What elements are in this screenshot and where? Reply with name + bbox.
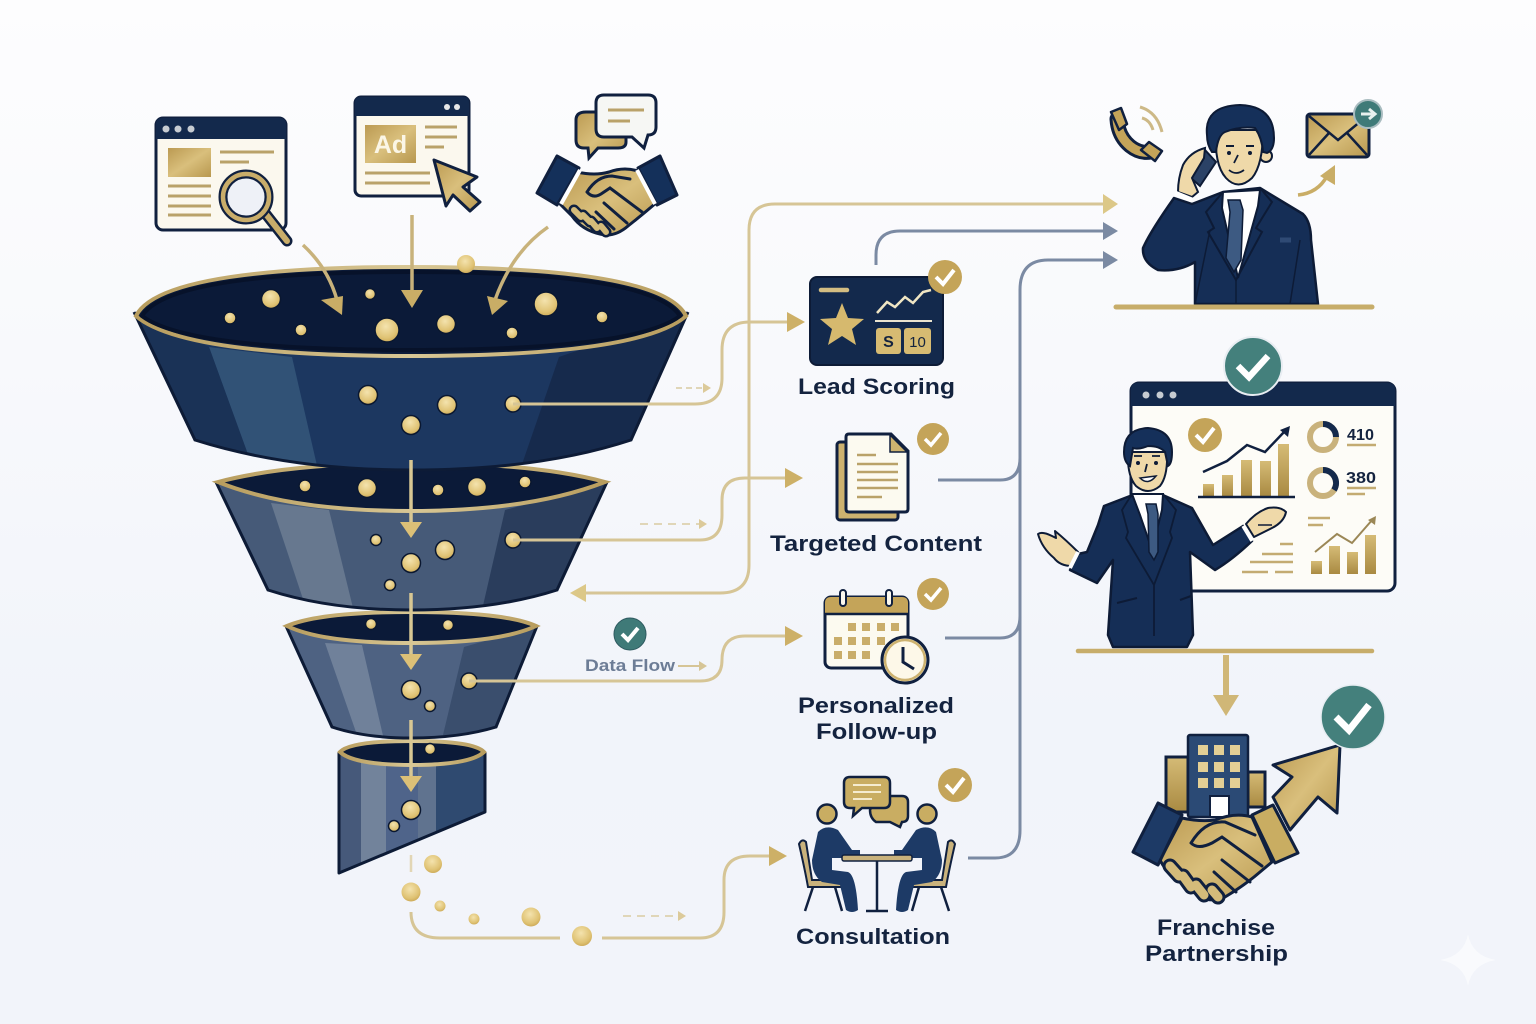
funnel	[134, 255, 690, 880]
person: presenter	[1038, 428, 1372, 651]
arrows: sources into funnel	[303, 215, 548, 315]
icon: sparkle watermark	[1440, 934, 1496, 986]
data flow label	[585, 618, 707, 675]
step: lead scoring: S	[883, 334, 894, 351]
funnel stage 2	[216, 463, 610, 612]
icon: website search	[156, 118, 287, 241]
step: consultation: Consultation	[796, 924, 950, 949]
dashboard panel	[1131, 337, 1395, 591]
falling leads	[402, 855, 592, 946]
funnel lead dots	[224, 255, 608, 832]
dashboard panel: 410	[1347, 427, 1374, 444]
step: lead scoring: 10	[909, 334, 926, 351]
icon: online ad	[355, 97, 480, 211]
icon: online ad: Ad	[374, 131, 407, 159]
arrows: through funnel	[400, 460, 422, 792]
step: personalized follow-up	[798, 578, 954, 744]
icon: phone	[1111, 107, 1162, 161]
icon: franchise partnership: Partnership	[1145, 941, 1288, 966]
step: lead scoring	[798, 260, 962, 399]
step: personalized follow-up: Personalized	[798, 693, 954, 718]
icon: franchise partnership: Franchise	[1157, 915, 1275, 940]
dashboard panel: 380	[1346, 470, 1376, 487]
gold return connector	[570, 194, 1118, 602]
arrow: to franchise partnership	[1213, 655, 1239, 716]
person: agent on phone	[1116, 105, 1372, 307]
funnel stage 4	[339, 741, 486, 880]
icon: referral handshake	[537, 156, 677, 235]
funnel stage 3	[286, 612, 537, 740]
step: targeted content	[770, 423, 983, 556]
step: targeted content: Targeted Content	[770, 531, 983, 556]
slate connectors to call agent	[876, 222, 1118, 858]
dashed flow arrows	[623, 383, 711, 921]
step: lead scoring: Lead Scoring	[798, 374, 955, 399]
gold connectors: funnel to nurture steps	[411, 312, 805, 938]
step: personalized follow-up: Follow-up	[816, 719, 937, 744]
icon: franchise partnership	[1133, 685, 1385, 966]
icon: email	[1298, 100, 1382, 195]
step: consultation	[796, 768, 972, 949]
icon: chat bubbles	[576, 95, 656, 158]
funnel stage 1	[134, 267, 690, 470]
data flow label: Data Flow	[585, 656, 676, 675]
